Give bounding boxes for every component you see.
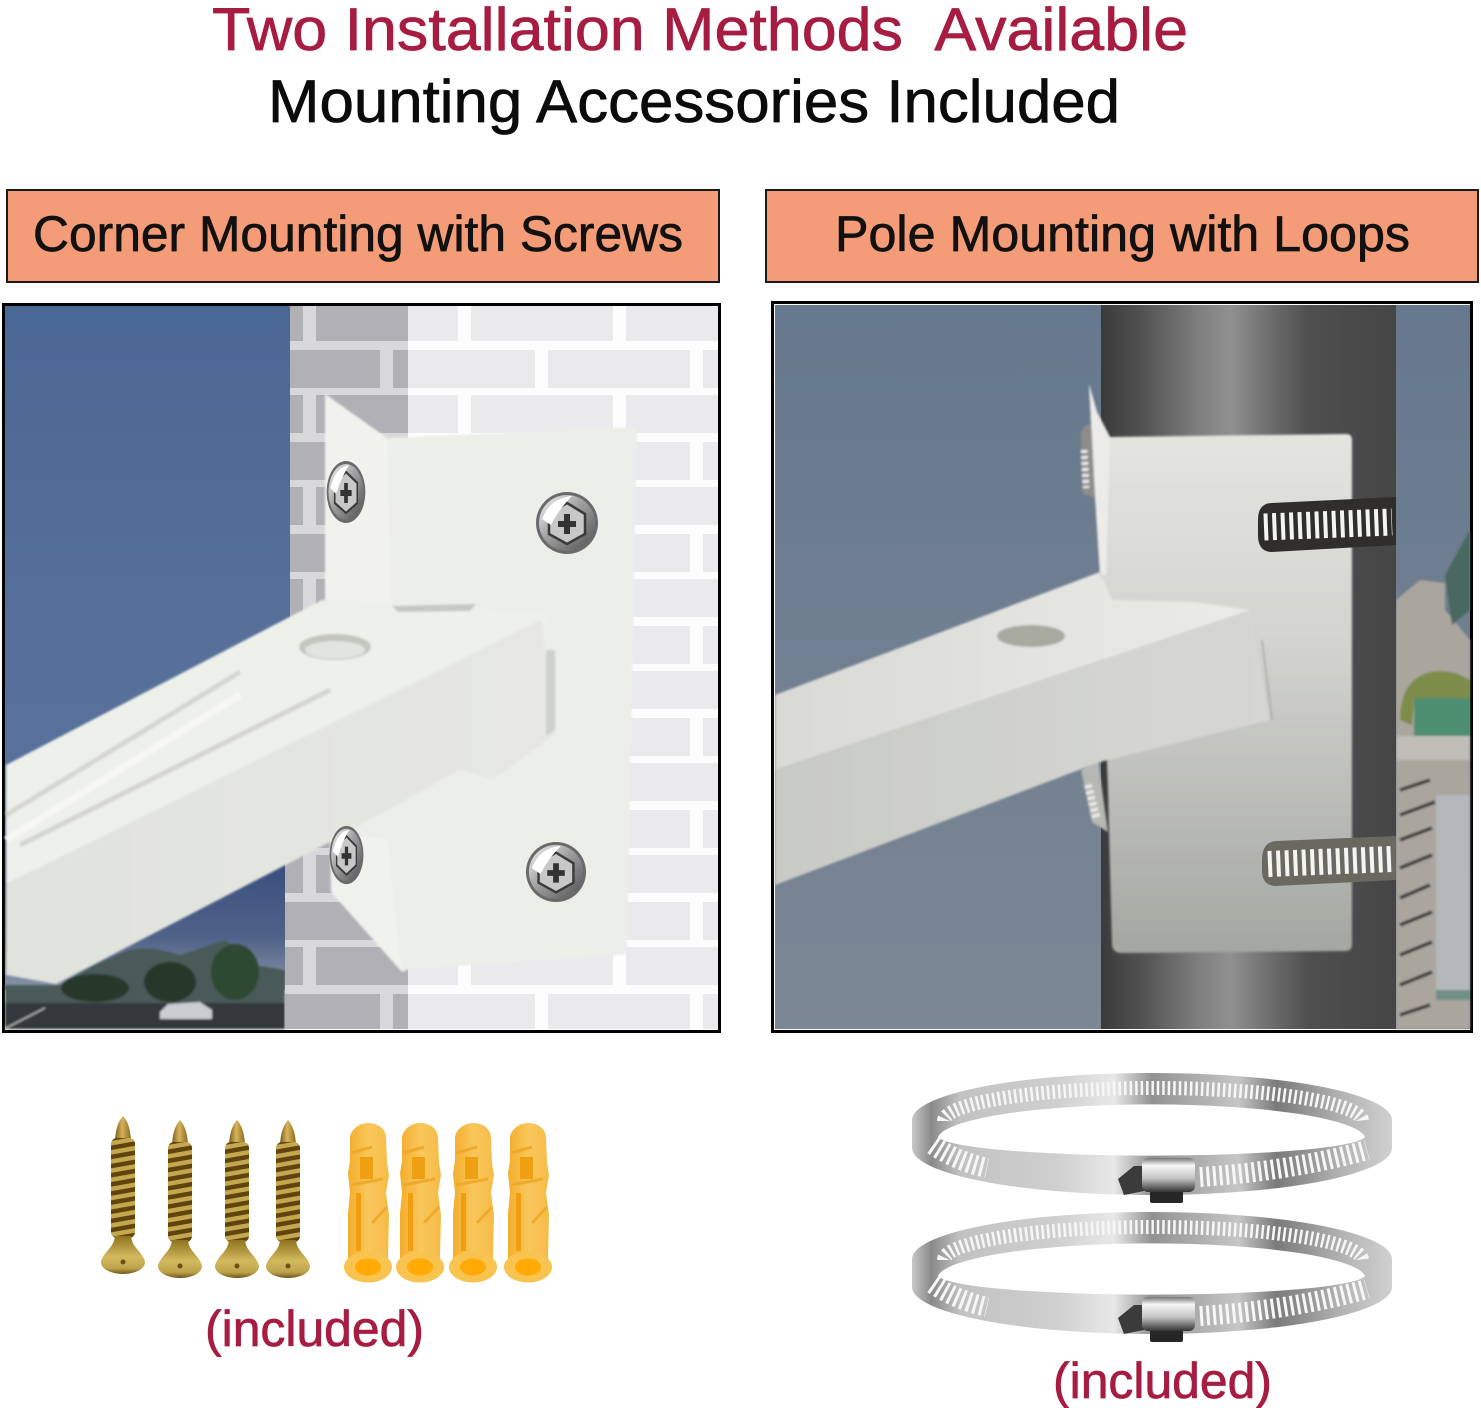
building: [1396, 530, 1470, 1029]
bracket: [325, 394, 637, 972]
sky: [775, 305, 1470, 1029]
panel: corner mounting photo: [4, 304, 720, 1032]
screws: [327, 461, 365, 523]
upper clamp strap: [1258, 497, 1396, 552]
lower clamp strap: [1262, 836, 1396, 886]
header: corner mounting: Corner Mounting with Screws: [33, 206, 683, 262]
wood screws: [101, 1116, 310, 1278]
bracket: [1089, 384, 1352, 953]
header: corner mounting: [7, 190, 719, 282]
arm: [6, 600, 555, 984]
title: [212, 0, 1188, 135]
sky: [5, 306, 291, 846]
arm: [775, 572, 1272, 885]
panel: pole mounting photo: [772, 302, 1472, 1032]
wall anchors: [344, 1123, 552, 1282]
hardware: screws and wall anchors: [101, 1116, 552, 1282]
header: pole mounting: [766, 190, 1478, 282]
back clamp pieces: [1081, 424, 1108, 832]
pole: [1101, 305, 1396, 1029]
brick wall: [290, 306, 410, 1029]
hardware: hose clamps: [912, 1073, 1392, 1342]
caption: included right: (included): [1053, 1353, 1272, 1408]
caption: included left: (included): [205, 1301, 424, 1357]
distant scenery: [5, 940, 285, 1029]
subheading: accessories: Mounting Accessories Included: [268, 68, 1120, 135]
header: pole mounting: Pole Mounting with Loops: [835, 206, 1410, 262]
